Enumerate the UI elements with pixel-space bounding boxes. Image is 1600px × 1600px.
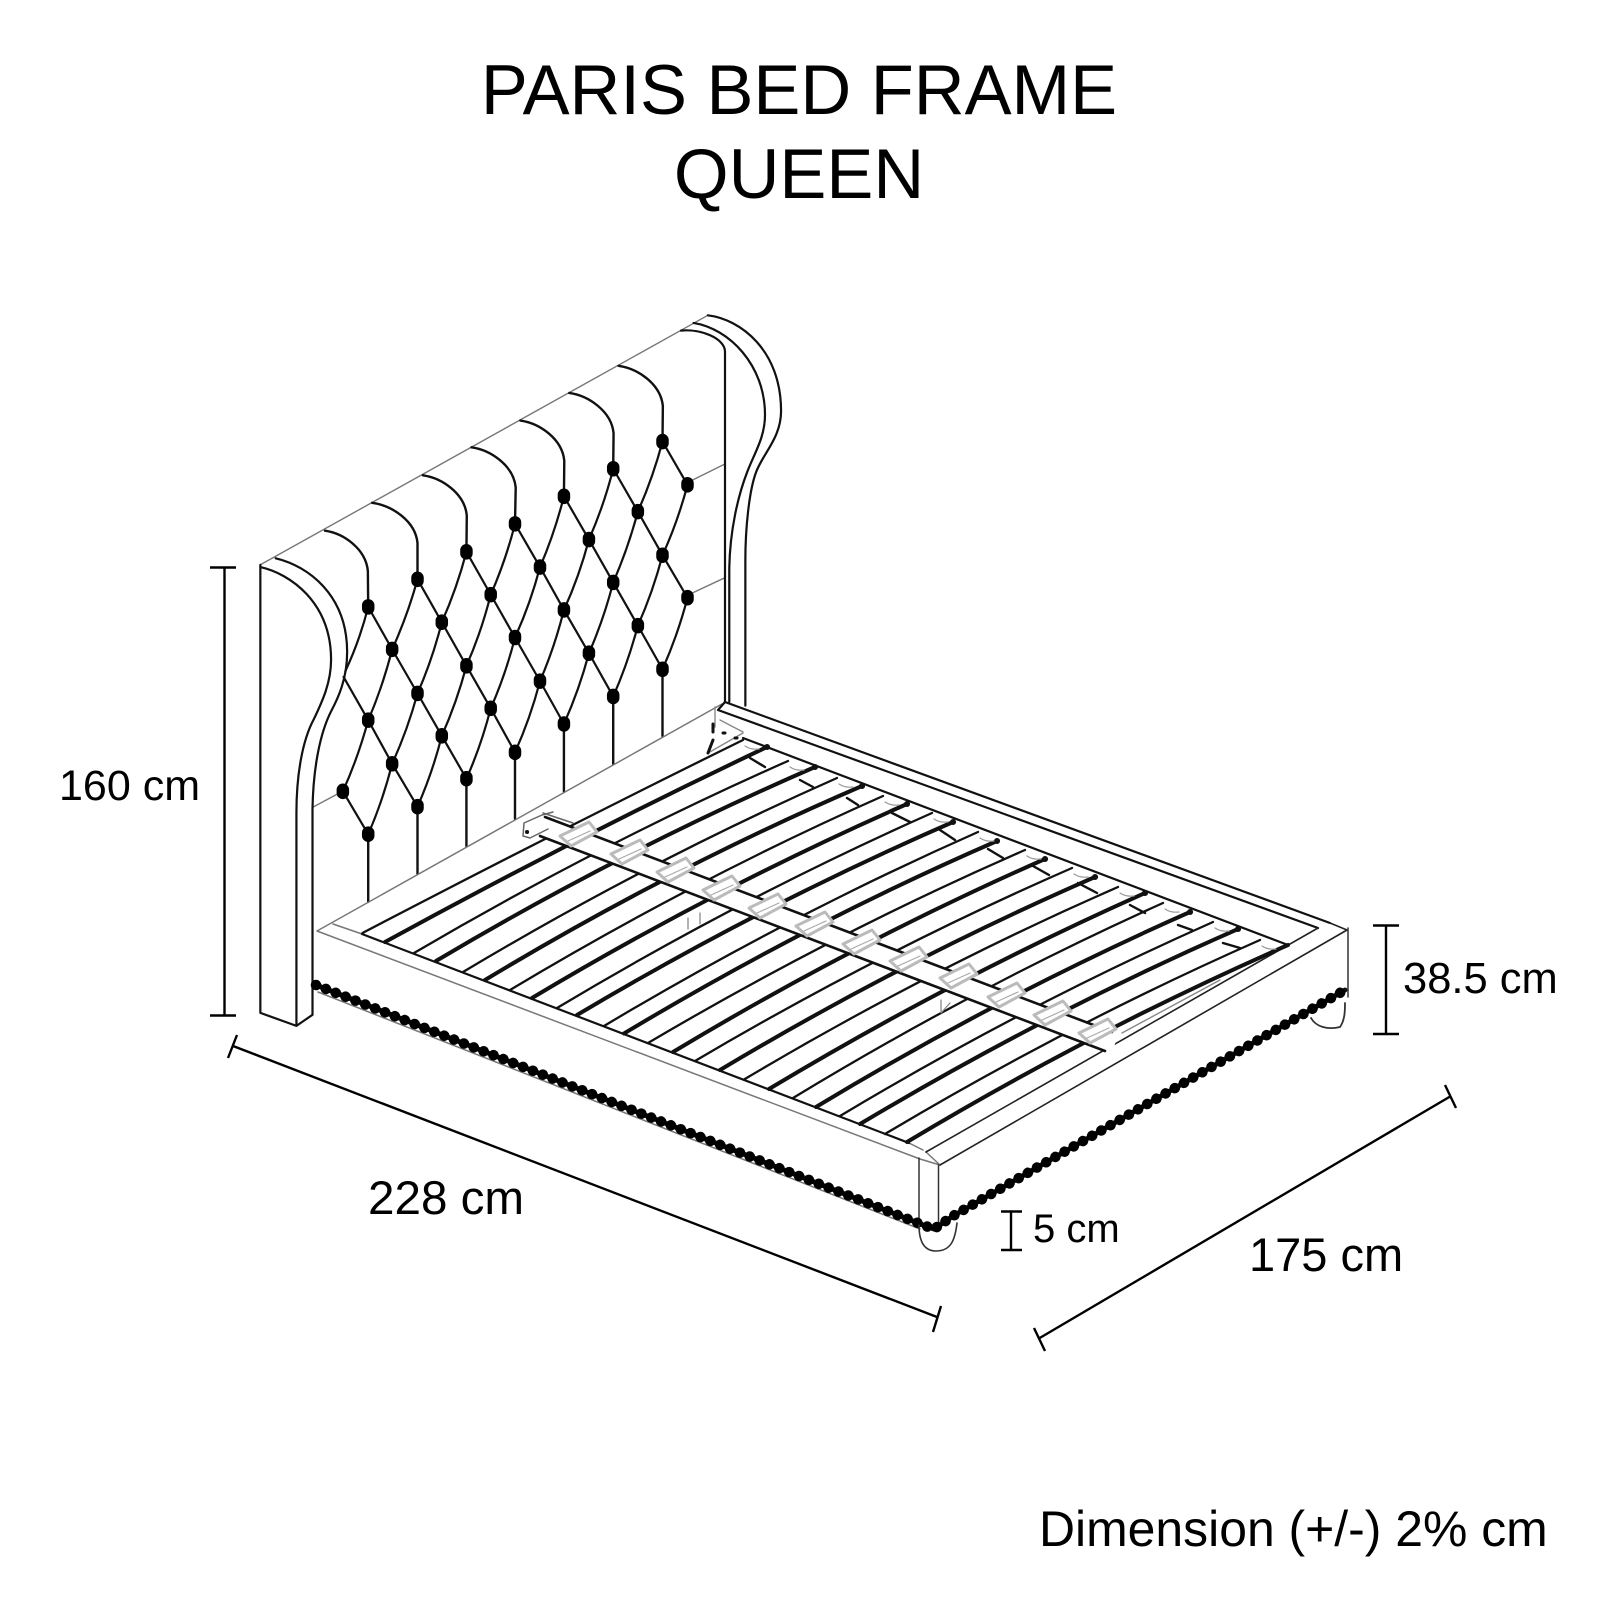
strap end bracket	[523, 812, 573, 838]
slats thin edges	[362, 740, 1260, 1134]
title	[481, 50, 1117, 213]
left wing	[260, 558, 347, 1026]
gray frame edges	[317, 704, 940, 1165]
dimension: leg 5 cm: 5 cm	[1033, 1207, 1120, 1251]
corner post and end edge	[919, 928, 1348, 1225]
headboard seams	[313, 465, 724, 807]
nailhead bead row	[316, 985, 1345, 1229]
far side rail	[718, 702, 1330, 928]
slat end caps	[767, 747, 1238, 929]
last slat inner edge	[1122, 980, 1220, 1033]
strap rivet	[525, 830, 529, 834]
dimension: base height 38.5 cm	[1373, 926, 1558, 1034]
front foot	[919, 1223, 957, 1251]
dimension: width 175 cm	[1034, 1085, 1456, 1351]
small support marks	[688, 913, 950, 1013]
strap clip centre lines	[568, 831, 1109, 1038]
rear foot	[1311, 1003, 1345, 1028]
bed base frame	[316, 702, 1348, 1251]
title: PARIS BED FRAME	[481, 50, 1117, 129]
tuft pleats	[325, 366, 663, 902]
dimension: length 228 cm: 228 cm	[368, 1172, 524, 1225]
far slat blocks	[750, 758, 1240, 948]
tolerance note: Dimension (+/-) 2% cm	[1039, 1501, 1548, 1557]
title: QUEEN	[674, 134, 924, 213]
dimension: width 175 cm: 175 cm	[1249, 1228, 1403, 1281]
dimension: height 160 cm: 160 cm	[59, 762, 200, 810]
nailhead studs	[316, 985, 1345, 1229]
dimension: base height 38.5 cm: 38.5 cm	[1403, 955, 1558, 1003]
tuft buttons	[343, 440, 687, 836]
stud trim lines	[318, 992, 920, 1229]
head bracket	[708, 707, 743, 753]
illustration: bed frame	[260, 315, 1348, 1251]
diamond tufting lines	[343, 442, 687, 834]
headboard	[260, 315, 781, 1026]
dimension: height 160 cm	[59, 568, 236, 1016]
strap clips	[560, 822, 1116, 1043]
slat bed edges	[362, 738, 1288, 1143]
foot rail	[926, 923, 1347, 1165]
center strap	[540, 817, 1116, 1051]
slats thick edges	[385, 747, 1288, 1142]
right wing	[681, 315, 781, 706]
far slat gray clips	[745, 746, 1276, 949]
head bracket screws	[708, 724, 737, 753]
dimension: length 228 cm	[228, 1035, 941, 1332]
headboard top edge	[260, 315, 708, 565]
